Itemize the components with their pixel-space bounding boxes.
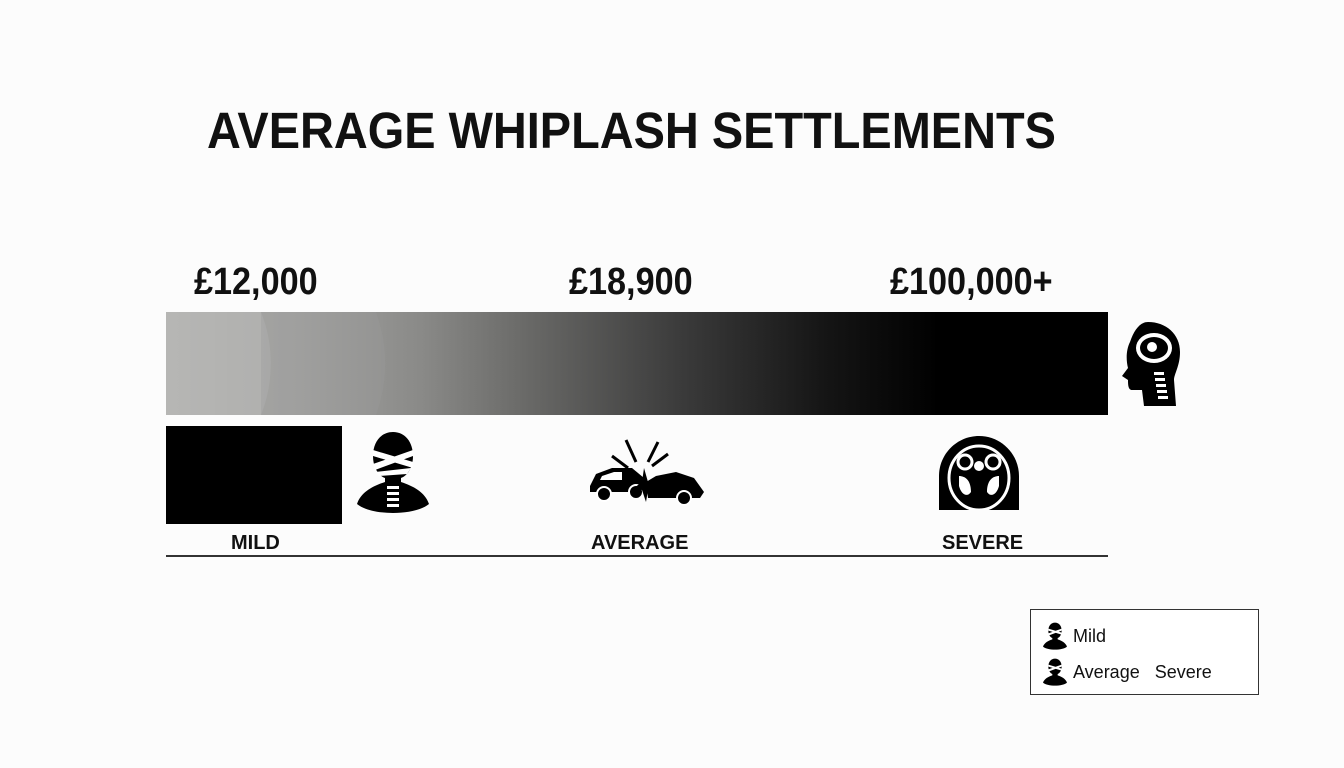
baseline bbox=[166, 555, 1108, 557]
title: AVERAGE WHIPLASH SETTLEMENTS bbox=[207, 102, 1056, 159]
legend item: mild: Mild bbox=[1073, 626, 1106, 646]
label: severe: SEVERE bbox=[942, 532, 1023, 554]
icon: head x-ray bbox=[1122, 322, 1180, 406]
legend bbox=[1030, 609, 1259, 695]
label: average: AVERAGE bbox=[591, 532, 688, 554]
value: mild: £12,000 bbox=[194, 261, 318, 303]
value: average: £18,900 bbox=[569, 261, 693, 303]
legend item: mild bbox=[1043, 622, 1106, 650]
icon: bandaged head bbox=[357, 432, 429, 513]
icon: car crash bbox=[590, 439, 704, 504]
mild box bbox=[166, 426, 342, 524]
label: mild: MILD bbox=[231, 532, 280, 554]
legend item: average severe: Average Severe bbox=[1073, 662, 1212, 682]
legend item: average severe bbox=[1043, 658, 1212, 686]
gradient bar bbox=[166, 312, 1108, 415]
value: severe: £100,000+ bbox=[890, 261, 1053, 303]
icon: brain scan bbox=[939, 436, 1019, 510]
